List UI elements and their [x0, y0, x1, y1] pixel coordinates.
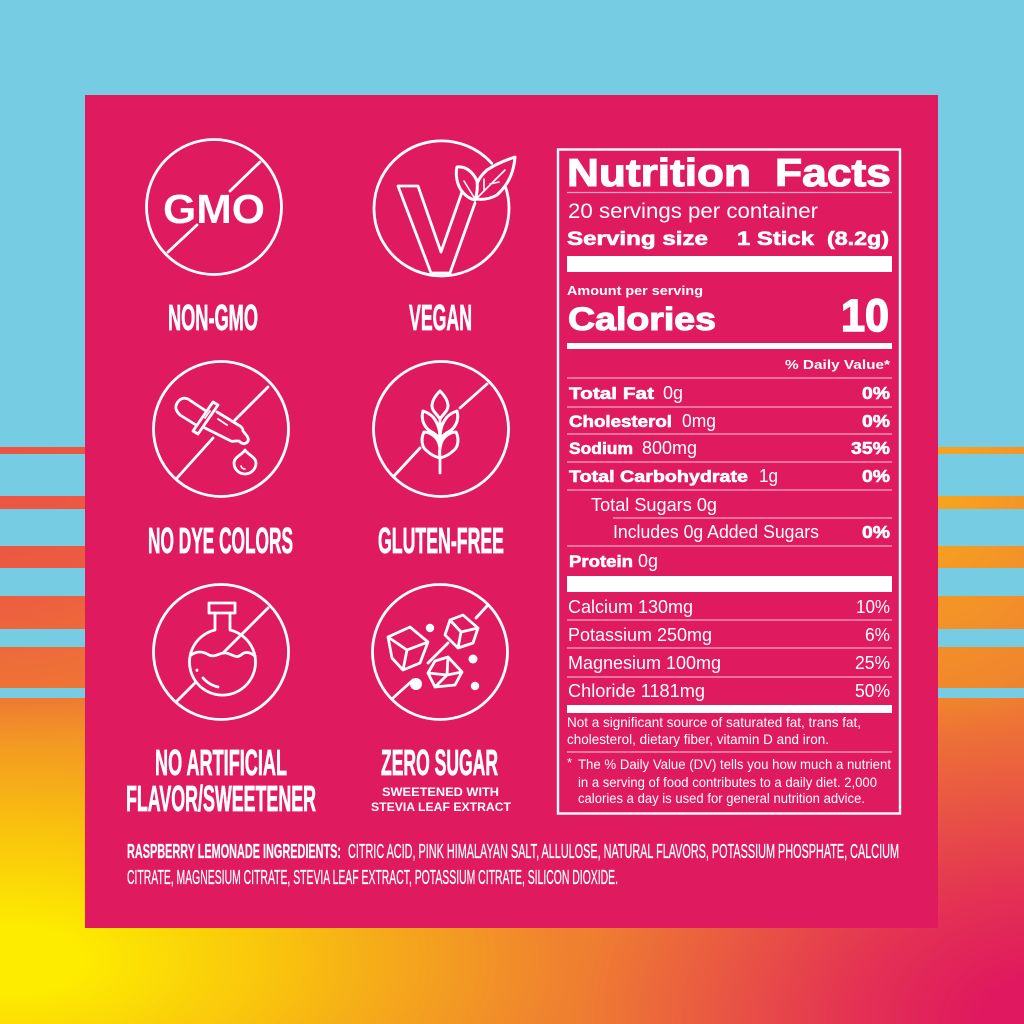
label: zero sugar: ZERO SUGAR — [381, 742, 498, 783]
nutrition title — [567, 152, 891, 195]
nutrition title: Nutrition — [567, 152, 751, 195]
blue sky bands — [0, 0, 1024, 698]
ingredients: RASPBERRY LEMONADE INGREDIENTS: — [127, 840, 341, 863]
nutrient table: Total Sugars 0g — [591, 495, 717, 515]
minerals table: 25% — [855, 653, 890, 673]
nutrient table: Total Carbohydrate — [569, 467, 748, 486]
nutrient table: 0g — [663, 383, 683, 403]
nutrient table: Total Fat — [569, 384, 654, 403]
minerals table: Calcium 130mg — [568, 597, 693, 617]
calories: Calories — [568, 301, 716, 337]
icon: no dye colors — [154, 362, 288, 496]
servings: 20 servings per container — [568, 199, 818, 223]
footnotes: Not a significant source of saturated fat, trans fat, — [567, 714, 861, 730]
calories: % Daily Value* — [785, 358, 890, 372]
minerals table: Magnesium 100mg — [568, 653, 721, 673]
panel: product information: NO DYE COLORS — [148, 520, 293, 561]
panel: product information: VEGAN — [409, 297, 472, 338]
nutrient table: 35% — [851, 438, 890, 458]
nutrient table: 800mg — [642, 438, 697, 458]
panel: product information — [85, 95, 938, 928]
ingredients — [127, 840, 899, 889]
servings: 1 Stick — [737, 229, 815, 250]
minerals table: Potassium 250mg — [568, 625, 712, 645]
footnotes: calories a day is used for general nutrition advice. — [578, 790, 865, 806]
servings: (8.2g) — [827, 229, 889, 250]
label: non-GMO: NON-GMO — [168, 297, 258, 338]
label: no artificial flavor/sweetener — [126, 742, 316, 819]
nutrient table: Sodium — [569, 439, 633, 458]
minerals table: 10% — [856, 597, 890, 617]
label: zero sugar: STEVIA LEAF EXTRACT — [371, 800, 512, 814]
nutrient table: 0% — [862, 411, 890, 431]
icon: non-GMO: GMO — [163, 186, 265, 232]
footnotes — [567, 714, 892, 806]
nutrient table: 0% — [862, 466, 890, 486]
icon: vegan — [374, 141, 515, 276]
nutrient table: 0% — [862, 522, 890, 542]
footnotes: The % Daily Value (DV) tells you how much a nutrient — [578, 756, 891, 772]
label: zero sugar: SWEETENED WITH — [382, 785, 499, 799]
nutrient table: 0mg — [682, 411, 716, 431]
label: no artificial flavor/sweetener: NO ARTIFICIAL — [155, 742, 287, 783]
servings — [567, 192, 892, 272]
footnotes: in a serving of food contributes to a daily diet. 2,000 — [578, 774, 877, 790]
minerals table: 6% — [865, 625, 890, 645]
calories — [567, 283, 892, 372]
icon: non-GMO — [146, 140, 282, 274]
panel: product information: GLUTEN-FREE — [378, 520, 504, 561]
calories: Amount per serving — [567, 283, 703, 298]
nutrient table: Cholesterol — [569, 412, 672, 431]
nutrient table: Protein — [569, 552, 633, 571]
nutrient table: Includes 0g Added Sugars — [613, 522, 819, 542]
minerals table: Chloride 1181mg — [568, 681, 705, 701]
icon: zero sugar — [372, 584, 508, 720]
footnotes: * — [567, 755, 572, 770]
icon: no artificial flavor — [154, 584, 288, 720]
nutrition title: Facts — [775, 152, 891, 195]
minerals table — [567, 597, 892, 713]
minerals table: 50% — [855, 681, 890, 701]
nutrient table: 1g — [759, 466, 778, 486]
icon: gluten-free — [374, 362, 508, 496]
footnotes: cholesterol, dietary fiber, vitamin D and iron. — [567, 731, 829, 747]
label: zero sugar — [371, 742, 512, 814]
nutrient table — [567, 378, 892, 592]
calories: 10 — [841, 290, 889, 341]
panel: nutrition facts — [558, 150, 900, 814]
panel: product information: FLAVOR/SWEETENER — [126, 778, 316, 819]
nutrient table: 0g — [638, 551, 658, 571]
nutrient table: 0% — [862, 383, 890, 403]
servings: Serving size — [567, 229, 708, 250]
